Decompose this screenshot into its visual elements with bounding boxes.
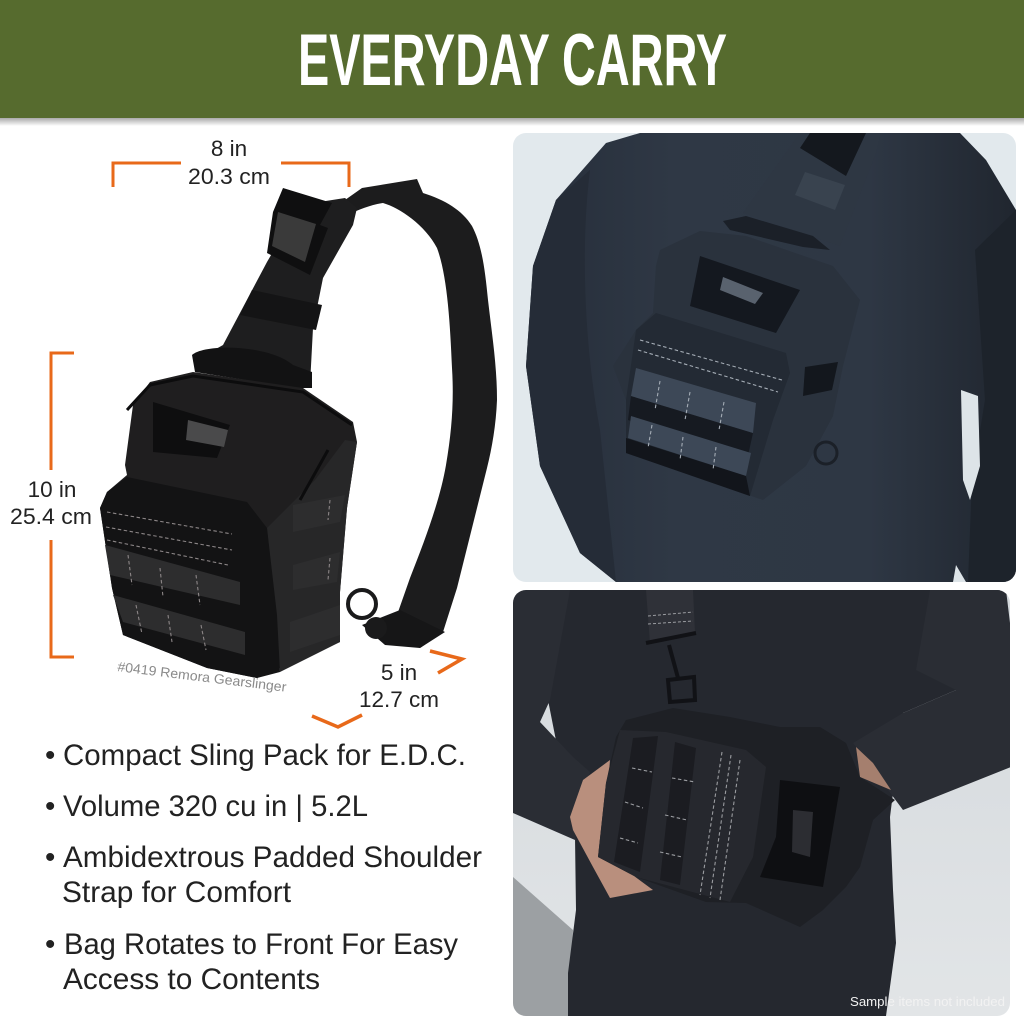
upper strap panel [193, 198, 357, 385]
dimension: height: 10 in [28, 477, 76, 502]
dimension: depth: 12.7 cm [359, 687, 439, 712]
dimension: depth: 5 in [381, 660, 417, 685]
header banner [0, 0, 1024, 126]
right wrist [856, 747, 891, 790]
main zipper seam [127, 376, 352, 500]
feature 1: Compact Sling Pack for E.D.C. [63, 739, 466, 772]
photo: rotated to front [513, 590, 1011, 1016]
torso [548, 590, 1000, 1016]
brand label [792, 810, 813, 857]
dimension: height [10, 353, 92, 657]
feature 3: Strap for Comfort [62, 876, 291, 909]
sling strap [743, 133, 881, 246]
product caption: #0419 Remora Gearslinger [117, 659, 288, 695]
top handle [192, 348, 312, 388]
front panel [598, 730, 766, 902]
side webbing [803, 362, 838, 396]
dimension: width: 20.3 cm [188, 164, 270, 189]
feature 4: Access to Contents [63, 963, 320, 996]
feature 1: • [45, 739, 55, 772]
photo: worn on back [513, 133, 1016, 582]
bag body [100, 372, 357, 678]
left arm [513, 590, 575, 840]
shirt shading [526, 170, 616, 582]
bottom ring and clip [348, 590, 387, 639]
front pocket [626, 313, 790, 496]
MOLLE webbing [105, 495, 345, 655]
strap tab [362, 610, 445, 648]
feature 2: Volume 320 cu in | 5.2L [63, 790, 368, 823]
front bag [598, 708, 895, 927]
left hand [570, 760, 653, 898]
dimension: width: 8 in [211, 136, 247, 161]
velcro [760, 780, 840, 887]
handle [723, 216, 830, 250]
gap between torso and right arm [953, 390, 980, 582]
stitching [106, 500, 330, 650]
dimension: depth [312, 651, 462, 727]
ground [513, 877, 573, 1016]
strap buckle [800, 133, 866, 176]
side panel [267, 440, 357, 672]
front pocket [100, 477, 280, 678]
feature 3 [45, 841, 482, 909]
feature 3: • [45, 841, 55, 874]
dimension: height: 25.4 cm [10, 504, 92, 529]
note: Sample items not included [850, 994, 1005, 1009]
shoulder strap [345, 179, 497, 648]
stitching [620, 752, 740, 900]
brand label [720, 277, 763, 304]
swivel clip [646, 633, 696, 702]
webbing [614, 736, 696, 885]
brand label [186, 420, 228, 447]
person torso and arms [526, 133, 1016, 582]
velcro patch [690, 256, 800, 333]
dimension: width [113, 136, 349, 189]
feature 3: Ambidextrous Padded Shoulder [63, 841, 482, 874]
title: EVERYDAY CARRY [298, 20, 727, 101]
buckle [267, 188, 332, 275]
velcro patch [153, 402, 230, 458]
webbing [628, 396, 753, 452]
stitching [638, 340, 782, 470]
product photo: sling bag [100, 179, 497, 678]
feature 4 [45, 928, 458, 996]
right arm [892, 590, 1010, 810]
feature 4: Bag Rotates to Front For Easy [64, 928, 458, 961]
feature list [45, 739, 482, 996]
feature 4: • [45, 928, 55, 961]
feature 2: • [45, 790, 55, 823]
shoulder strap [646, 590, 695, 643]
worn bag [674, 231, 846, 499]
D ring [815, 442, 837, 464]
